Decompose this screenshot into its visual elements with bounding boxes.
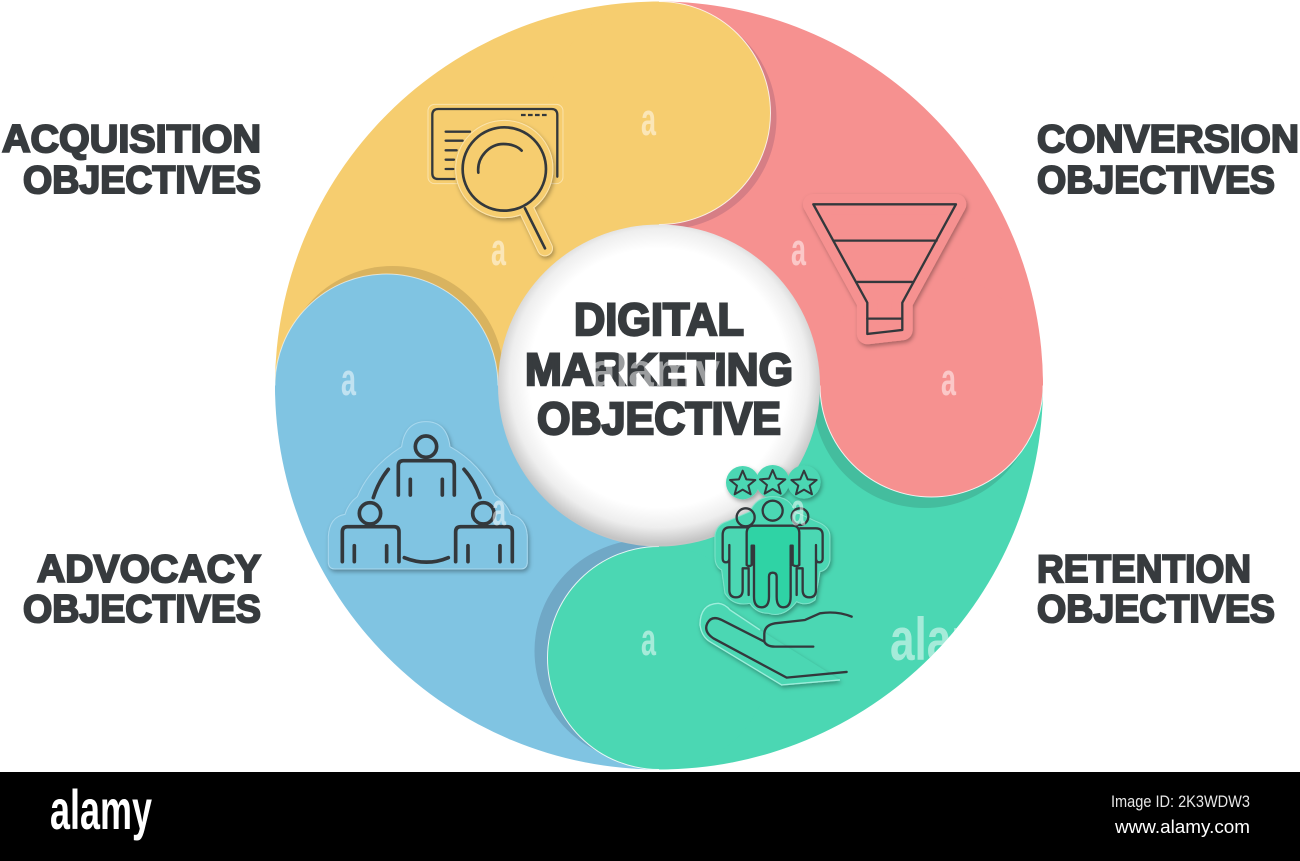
people (715, 497, 830, 614)
lobe: acquisition (548, 2, 770, 224)
lobe: advocacy (275, 274, 498, 497)
segment: advocacy base (275, 386, 659, 770)
label: retention objectives (1037, 548, 1275, 631)
label: retention objectives: RETENTION (1037, 548, 1251, 591)
watermarks: a (641, 94, 657, 145)
watermarks: alamy (590, 344, 720, 396)
shadow: retention lobe (534, 542, 650, 750)
icon: conversion funnel (813, 204, 956, 334)
centre heading: OBJECTIVE (537, 393, 781, 444)
label: retention objectives: OBJECTIVES (1037, 588, 1275, 631)
label: advocacy objectives (23, 548, 261, 631)
segment: retention base (659, 386, 1043, 770)
footer url: www.alamy.com (1114, 817, 1250, 837)
segment: acquisition base (275, 2, 659, 386)
lobe rims (275, 2, 1043, 770)
hand (700, 603, 852, 685)
shadow: advocacy lobe (303, 266, 502, 378)
watermarks: a (941, 354, 957, 405)
label: advocacy objectives: ADVOCACY (37, 548, 261, 591)
label: acquisition objectives: ACQUISITION (2, 118, 261, 161)
centre circle (498, 224, 820, 546)
stars (726, 465, 821, 499)
label: acquisition objectives (2, 118, 261, 202)
icon: advocacy network of people (328, 422, 527, 569)
label: conversion objectives: CONVERSION (1037, 118, 1299, 161)
lobe: retention (548, 546, 770, 770)
watermarks: a (791, 224, 807, 275)
donut wheel (275, 2, 1043, 770)
watermarks: a (492, 484, 507, 535)
footer image id: Image ID: 2K3WDW3 (1111, 792, 1250, 811)
watermarks: alamy (890, 606, 1015, 673)
shadow: acquisition lobe (666, 34, 776, 227)
shadow: conversion lobe (816, 394, 1020, 508)
centre heading: DIGITAL (574, 294, 744, 345)
watermarks: a (641, 614, 657, 665)
centre heading: MARKETING (525, 344, 793, 395)
icon: search magnifier over web page (428, 104, 563, 248)
centre heading (525, 294, 793, 444)
label: advocacy objectives: OBJECTIVES (23, 588, 261, 631)
lobe: conversion (820, 274, 1043, 497)
watermarks: a (341, 354, 357, 405)
watermarks: a (791, 484, 806, 535)
label: conversion objectives (1037, 118, 1299, 202)
footer bar (0, 772, 1300, 861)
label: conversion objectives: OBJECTIVES (1037, 159, 1275, 202)
watermarks (342, 110, 956, 660)
label: acquisition objectives: OBJECTIVES (23, 159, 261, 202)
segment: conversion base (659, 2, 1043, 386)
footer logo: alamy (50, 778, 152, 841)
icon: retention people, stars and hand (700, 465, 852, 685)
watermarks: a (491, 224, 507, 275)
